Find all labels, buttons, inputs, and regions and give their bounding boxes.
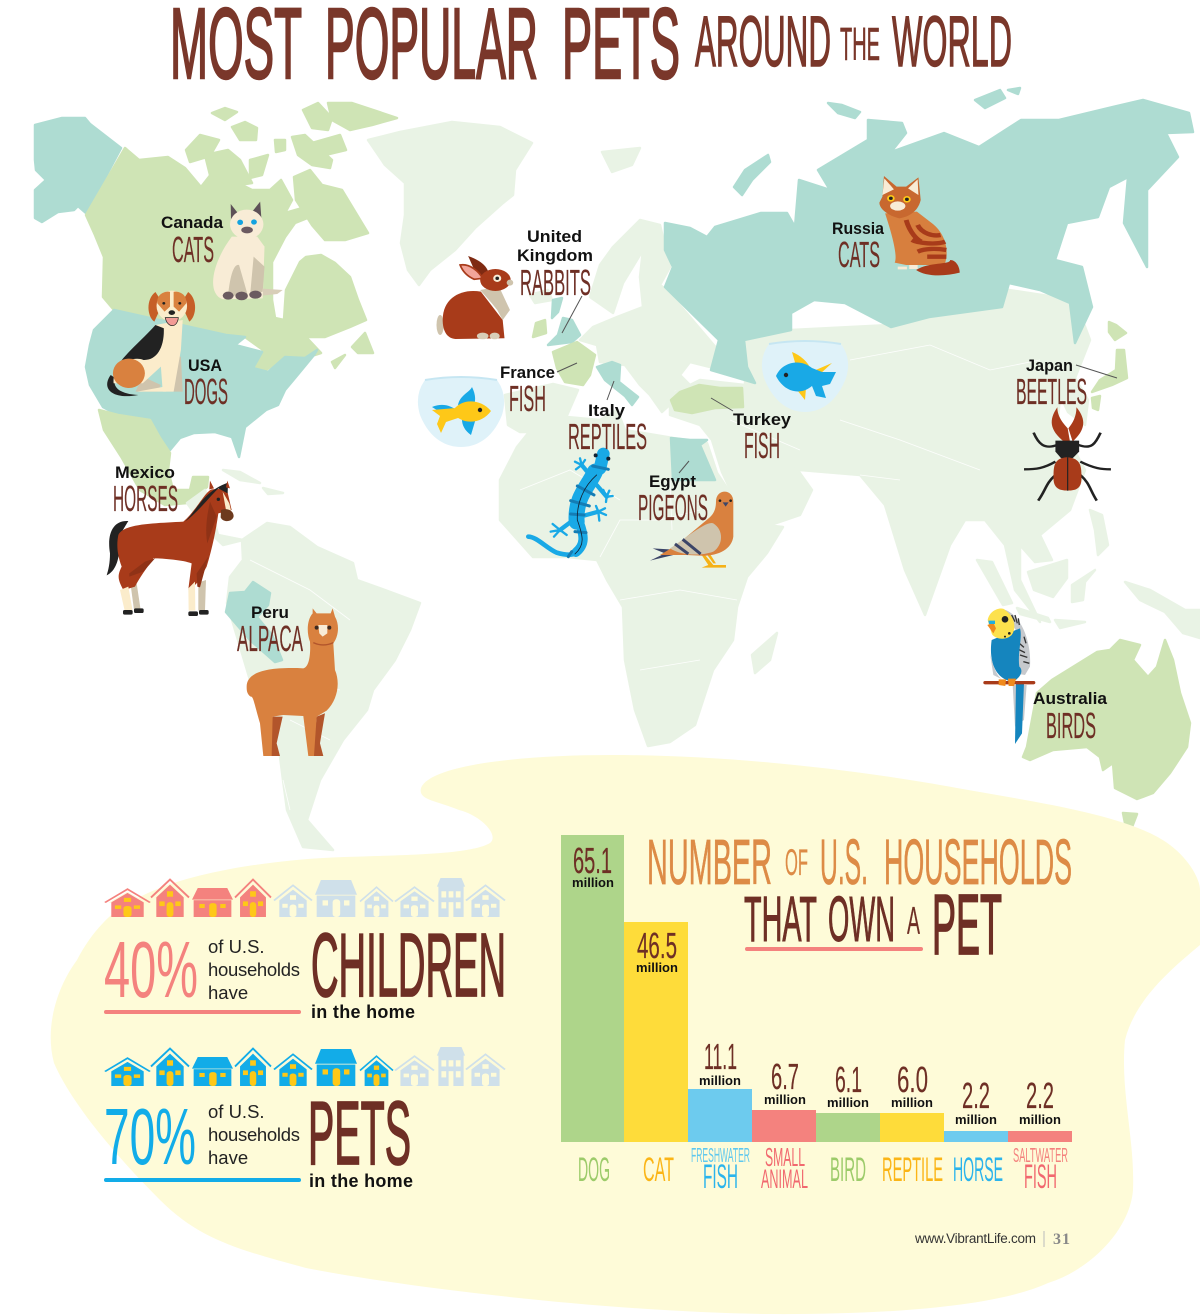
- label: United Kingdom rabbits: Kingdom: [517, 246, 593, 265]
- text: HORSES: [113, 478, 178, 519]
- map: Peru: [226, 582, 282, 662]
- figure: 70%: 70%: [104, 1092, 196, 1181]
- panel: children statistic: [104, 878, 506, 1022]
- text: DOGS: [184, 371, 228, 412]
- value: 6.0 million: million: [891, 1095, 933, 1110]
- leader lines: [557, 296, 1117, 473]
- label: France fish: France: [500, 363, 555, 382]
- label: Canada cats: CATS: [172, 229, 214, 270]
- map: United States: [86, 310, 317, 457]
- axis label: small animal: [761, 1142, 808, 1194]
- bar: horse: [944, 1131, 1008, 1142]
- title: THE: [840, 18, 880, 70]
- label: Turkey fish: FISH: [744, 425, 780, 466]
- label: Mexico horses: [113, 463, 178, 519]
- label: USA dogs: USA: [188, 356, 222, 375]
- bar chart: FRESHWATER: [691, 1145, 750, 1167]
- map: Europe: [505, 220, 718, 432]
- rule: [104, 1010, 301, 1014]
- bar chart: BIRD: [830, 1151, 866, 1189]
- heading: number of U.S. households that own a pet: OF: [785, 842, 808, 883]
- map: Canada mainland: [86, 148, 366, 370]
- text: of U.S. households have: have: [208, 1147, 248, 1168]
- text: SALTWATER: [1013, 1145, 1068, 1167]
- label: Australia birds: [1033, 689, 1108, 746]
- text: BEETLES: [1016, 371, 1087, 412]
- icon: Egypt pigeon: [650, 492, 733, 568]
- value: 11.1 million: 11.1: [704, 1036, 737, 1077]
- label: Italy reptiles: [568, 401, 647, 457]
- value: 65.1 million: 65.1: [573, 840, 612, 881]
- bar: dog: [561, 835, 624, 1142]
- value: 65.1 million: million: [572, 875, 614, 890]
- label: France fish: [500, 363, 555, 419]
- map: Madagascar: [752, 633, 777, 673]
- heading: number of U.S. households that own a pet: A: [907, 900, 920, 943]
- figure: 40%: 40%: [104, 925, 198, 1014]
- text: of U.S. households have: have: [208, 982, 248, 1003]
- label: United Kingdom rabbits: [517, 227, 593, 303]
- label: USA dogs: [184, 356, 228, 412]
- value: 6.1 million: [827, 1059, 869, 1110]
- text: WORLD: [892, 3, 1012, 82]
- value: 6.0 million: [891, 1059, 933, 1110]
- label: Egypt pigeons: [638, 472, 708, 528]
- map: Asia: [670, 290, 1090, 622]
- heading: number of U.S. households that own a pet: THAT: [744, 883, 817, 955]
- label: Russia cats: Russia: [832, 219, 885, 238]
- text: ALPACA: [237, 618, 303, 659]
- value: 2.2 million horse: million: [955, 1112, 997, 1127]
- icon: UK rabbit: [437, 256, 513, 339]
- value: 46.5 million: million: [636, 960, 678, 975]
- map: Greenland: [368, 122, 532, 285]
- icon: Canada cat: [213, 202, 283, 300]
- caption: in the home: in the home: [311, 1002, 415, 1022]
- label: Egypt pigeons: Egypt: [649, 472, 696, 491]
- icon: France fishbowl: [418, 377, 504, 447]
- title: [170, 0, 1012, 100]
- bar chart: [561, 835, 1072, 1196]
- map: Iceland and Svalbard: [530, 148, 640, 303]
- bar: saltwater fish: [1008, 1131, 1072, 1142]
- label: Japan beetles: [1016, 356, 1087, 412]
- map: Alaska: [35, 118, 121, 222]
- icon: Italy lizard: [528, 453, 613, 557]
- value: 46.5 million: [636, 925, 678, 975]
- value: 6.0 million: 6.0: [897, 1059, 928, 1100]
- bar chart: DOG: [578, 1151, 610, 1189]
- axis label: freshwater fish: FISH: [703, 1158, 738, 1196]
- icon: Turkey fishbowl: [762, 341, 848, 412]
- bar chart: CAT: [643, 1151, 674, 1189]
- bar chart: HORSE: [953, 1151, 1003, 1189]
- axis label: saltwater fish: FISH: [1024, 1158, 1057, 1196]
- footer: website and page number: www.VibrantLife.com: [914, 1231, 1036, 1246]
- text: CHILDREN: [311, 916, 506, 1016]
- footer: website and page number: 31: [1053, 1231, 1070, 1248]
- heading: number of U.S. households that own a pet: NUMBER: [647, 826, 772, 898]
- icon: Australia bird: [983, 608, 1035, 744]
- map: Ireland: [533, 320, 546, 337]
- bar chart: REPTILE: [882, 1151, 943, 1189]
- value: 2.2 million saltwater: 2.2: [1026, 1075, 1054, 1116]
- bar: small animal: [752, 1110, 816, 1142]
- map: South America: [227, 523, 420, 850]
- value: 6.7 million: 6.7: [771, 1056, 799, 1097]
- map: Canadian arctic islands: [186, 103, 397, 368]
- panel: pets statistic: PETS: [308, 1084, 411, 1184]
- heading: number of U.S. households that own a pet: [647, 826, 1072, 973]
- map: Japan: [1092, 322, 1127, 410]
- icon: Japan beetle: [1024, 407, 1111, 501]
- value: 46.5 million: 46.5: [637, 925, 677, 966]
- text: CATS: [838, 234, 880, 275]
- map: France: [553, 342, 595, 385]
- caption: in the home: in the home: [309, 1171, 413, 1191]
- value: 11.1 million: [699, 1036, 741, 1088]
- axis label: saltwater fish: [1013, 1145, 1068, 1196]
- map: Tasmania: [1123, 813, 1137, 827]
- text: of U.S. households have: of U.S.: [208, 936, 265, 957]
- label: Russia cats: [832, 219, 885, 275]
- label: Italy reptiles: Italy: [588, 401, 626, 420]
- map: Italy: [597, 362, 638, 405]
- title: AROUND: [695, 3, 831, 82]
- rule: [104, 1178, 301, 1182]
- map: Mexico: [99, 410, 208, 505]
- label: Canada cats: Canada: [161, 213, 224, 232]
- icon: Peru alpaca: [247, 608, 338, 756]
- value: 6.7 million: [764, 1056, 806, 1107]
- label: France fish: FISH: [509, 378, 546, 419]
- label: Mexico horses: Mexico: [115, 463, 175, 482]
- value: 2.2 million horse: 2.2: [962, 1075, 990, 1116]
- panel: pets statistic: [104, 1047, 505, 1191]
- icon: blue fish: [776, 352, 836, 400]
- value: 6.1 million: 6.1: [835, 1059, 862, 1100]
- map: Africa: [500, 410, 783, 746]
- label: Australia birds: BIRDS: [1046, 705, 1096, 746]
- houses row: 70 percent: [105, 1047, 505, 1086]
- map: Russia: [665, 100, 1193, 383]
- icon: Russia cat: [879, 176, 960, 275]
- map: UK: [548, 298, 580, 345]
- icon: gold fish: [432, 387, 491, 435]
- label: Turkey fish: Turkey: [733, 410, 792, 429]
- value: 2.2 million horse: [955, 1075, 997, 1127]
- text: of U.S. households have: [208, 1101, 300, 1168]
- value: 11.1 million: million: [699, 1073, 741, 1088]
- houses row: 40 percent: [105, 878, 505, 917]
- value: 6.1 million: million: [827, 1095, 869, 1110]
- heading: number of U.S. households that own a pet: PET: [932, 878, 1002, 973]
- text: of U.S. households have: [208, 936, 300, 1003]
- value: 65.1 million: [572, 840, 614, 890]
- background: pale yellow blob: [51, 755, 1200, 1314]
- bar: cat: [624, 922, 688, 1142]
- bar: bird: [816, 1113, 880, 1142]
- label: Japan beetles: Japan: [1026, 356, 1073, 375]
- label: Peru alpaca: [237, 603, 303, 659]
- value: 2.2 million saltwater: million: [1019, 1112, 1061, 1127]
- text: of U.S. households have: households: [208, 1124, 300, 1145]
- axis label: freshwater fish: [691, 1145, 750, 1196]
- text: of U.S. households have: households: [208, 959, 300, 980]
- map: Central America and Caribbean: [187, 470, 283, 545]
- map: Indonesia and New Guinea: [977, 510, 1200, 638]
- text: PIGEONS: [638, 487, 708, 528]
- value: 6.7 million: million: [764, 1092, 806, 1107]
- icon: Mexico horse: [107, 481, 234, 616]
- map: Egypt: [671, 438, 715, 480]
- label: Turkey fish: [733, 410, 792, 466]
- text: RABBITS: [520, 262, 591, 303]
- world map: [35, 88, 1200, 850]
- label: Australia birds: Australia: [1033, 689, 1108, 708]
- value: 2.2 million saltwater: [1019, 1075, 1061, 1127]
- text: of U.S. households have: of U.S.: [208, 1101, 265, 1122]
- heading: number of U.S. households that own a pet: OWN: [828, 883, 895, 955]
- footer: website and page number: [914, 1231, 1070, 1248]
- map: Russian arctic islands: [734, 88, 1020, 195]
- axis label: small animal: SMALL: [765, 1142, 805, 1172]
- heading: number of U.S. households that own a pet: U.S.: [820, 826, 868, 898]
- label: United Kingdom rabbits: United: [527, 227, 582, 246]
- label: Canada cats: [161, 213, 224, 270]
- map: Australia: [1023, 640, 1190, 799]
- icon: USA dog: [107, 291, 195, 396]
- bar chart: ANIMAL: [761, 1164, 808, 1194]
- bar: reptile: [880, 1113, 944, 1142]
- label: Peru alpaca: Peru: [251, 603, 289, 622]
- map: Turkey: [671, 385, 743, 413]
- text: REPTILES: [568, 416, 647, 457]
- bar: freshwater fish: [688, 1089, 752, 1142]
